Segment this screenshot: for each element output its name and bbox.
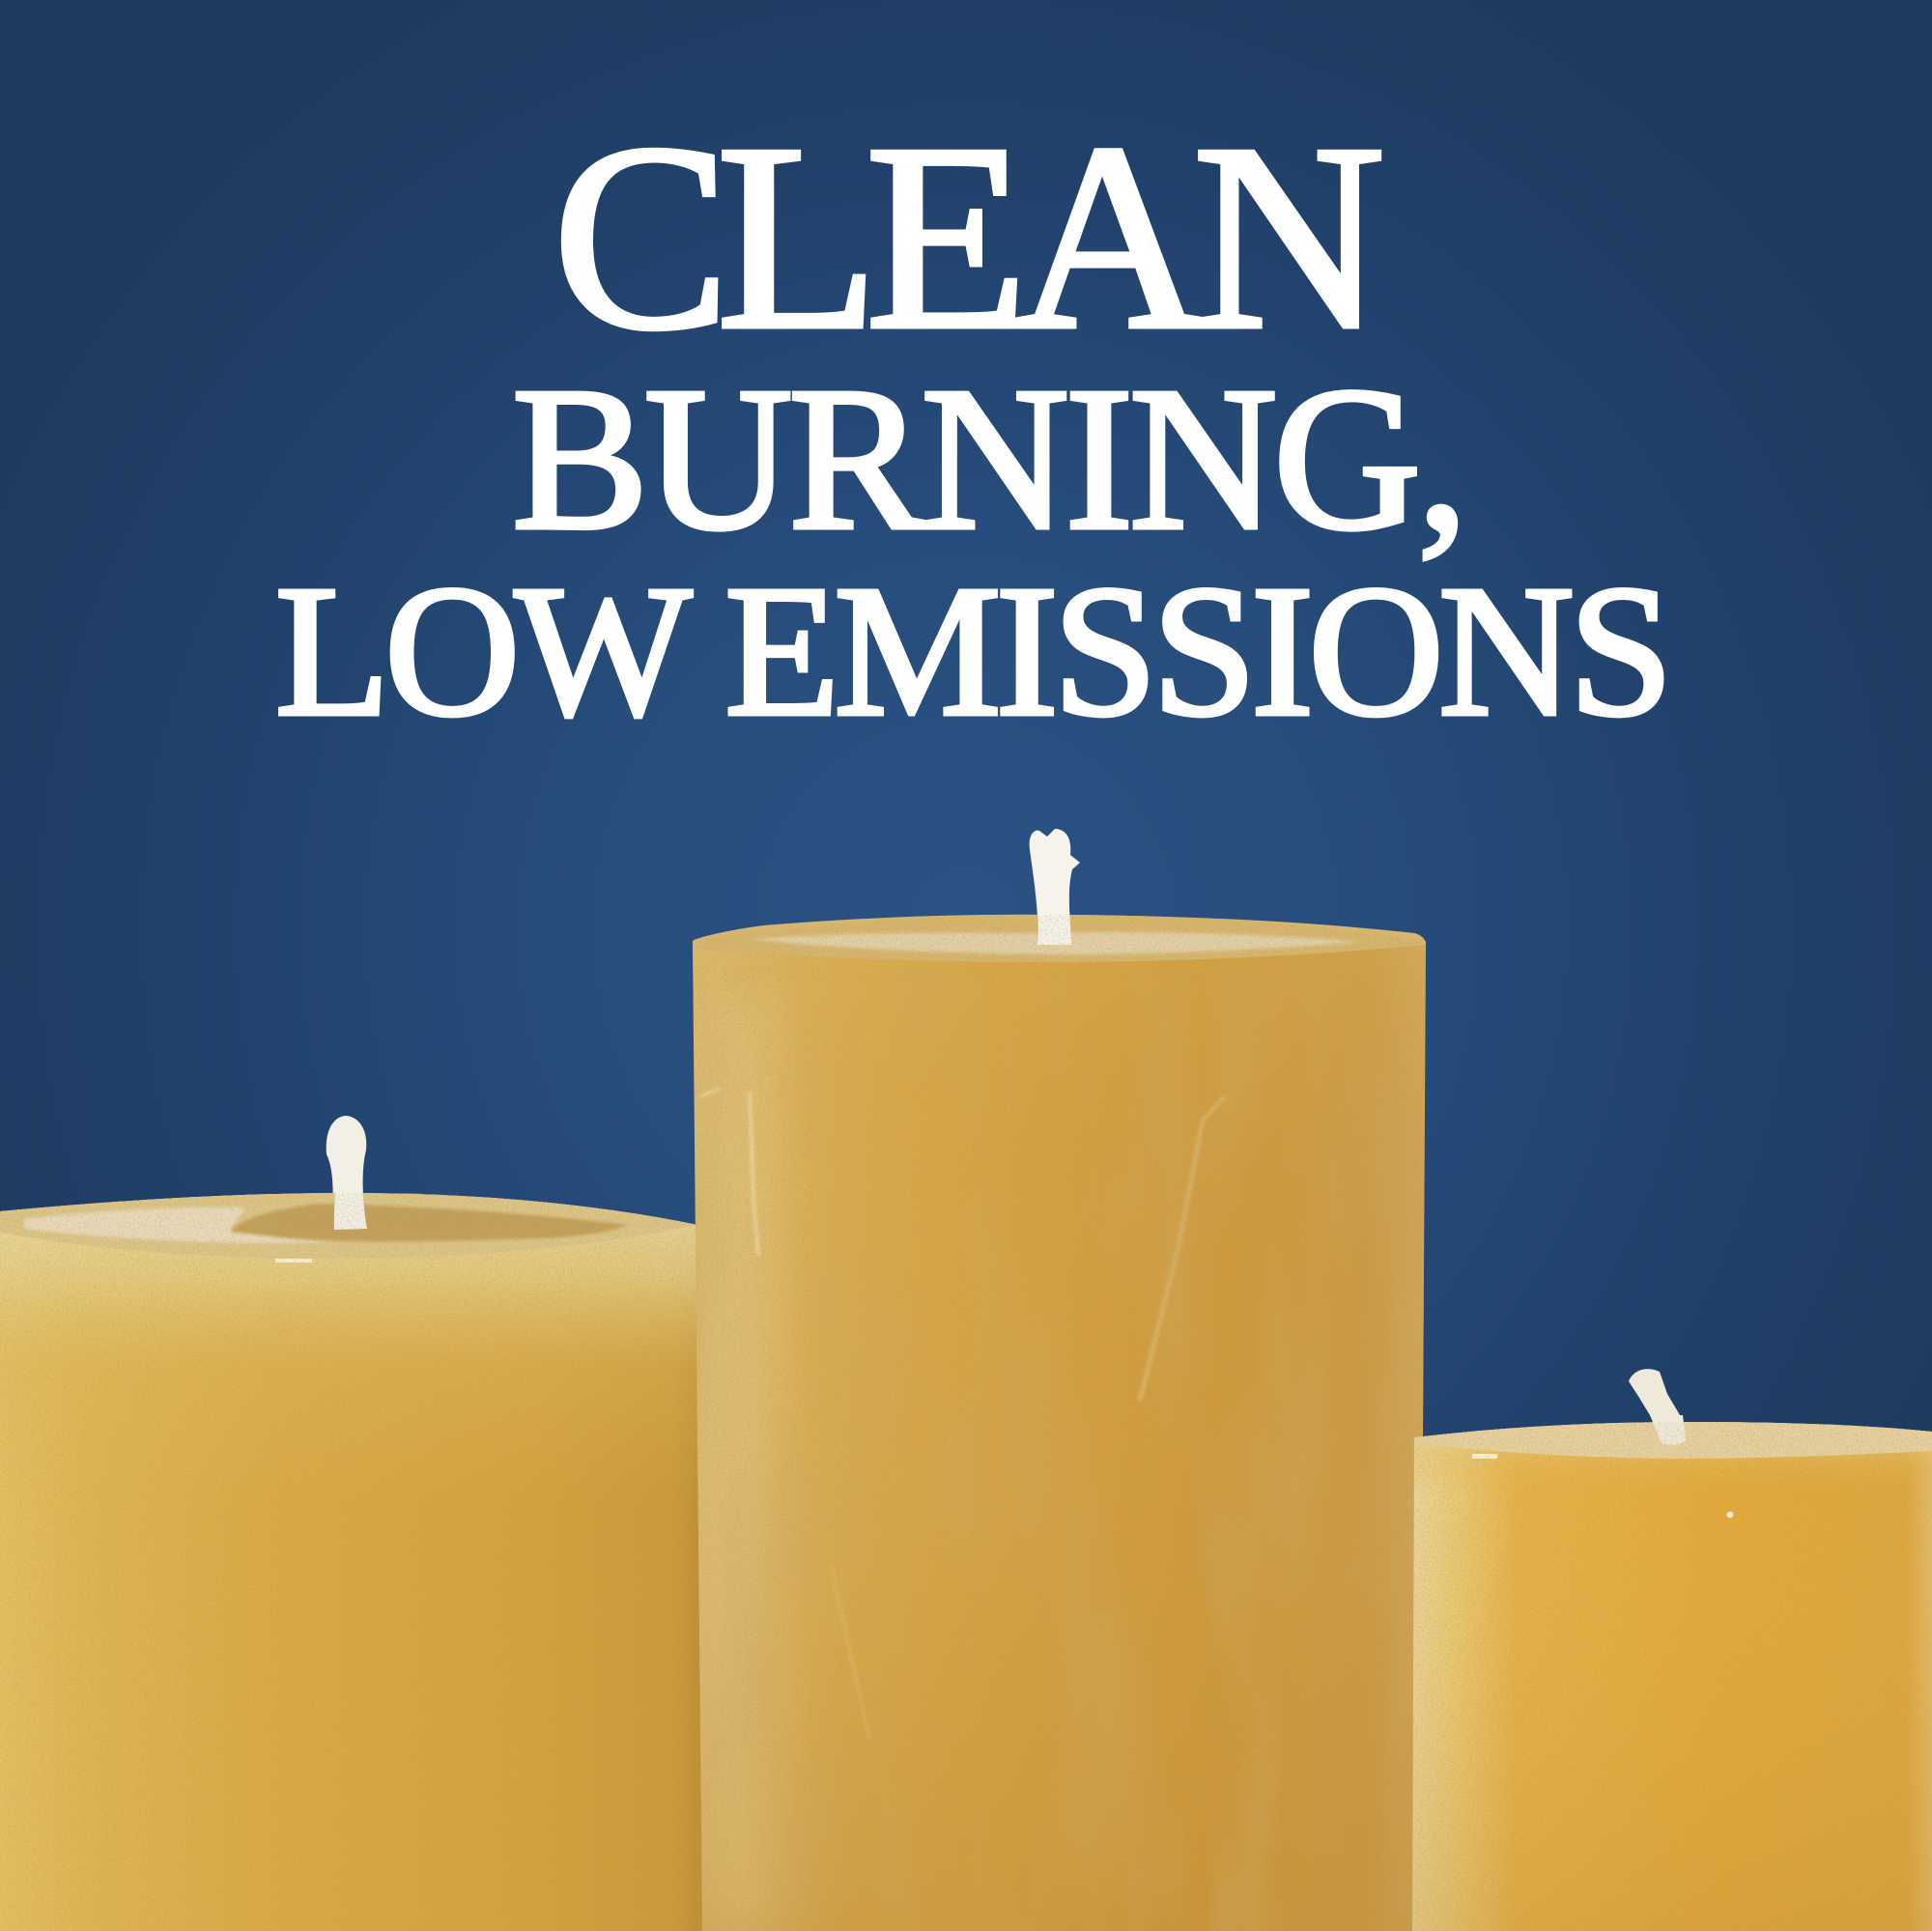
right candle [1412, 1369, 1932, 1931]
right candle top surface [1414, 1422, 1932, 1459]
left wick base [327, 1150, 367, 1230]
middle wick base [1036, 889, 1071, 945]
left highlight [275, 1259, 312, 1263]
middle wax mottling [693, 966, 1427, 1931]
title line: LOW EMISSIONS: LOW EMISSIONS [275, 547, 1673, 754]
left candle body [0, 1193, 707, 1931]
candles photo [0, 829, 1932, 1931]
title [275, 89, 1673, 754]
left candle [0, 1116, 707, 1931]
left candle top surface [0, 1193, 697, 1259]
middle candle [693, 829, 1427, 1931]
title line: BURNING,: BURNING, [512, 345, 1468, 572]
middle scratches left [700, 1089, 758, 1256]
right candle body [1412, 1422, 1932, 1931]
right spot [1727, 1511, 1733, 1519]
title line: CLEAN: CLEAN [553, 89, 1385, 384]
left candle wick [327, 1116, 367, 1230]
left top pale patch [24, 1207, 333, 1243]
middle candle wick [1030, 829, 1080, 945]
left top brown patch [230, 1204, 628, 1241]
right wick base [1650, 1415, 1686, 1445]
middle candle body [693, 915, 1426, 1931]
middle candle top surface [694, 915, 1426, 962]
right candle wick [1629, 1369, 1686, 1445]
middle scratch [1140, 1096, 1225, 1401]
middle lower scratches [831, 1565, 869, 1739]
wax grain texture [0, 908, 1932, 1931]
middle top pale patch [749, 932, 1362, 954]
right highlight [1472, 1454, 1497, 1459]
middle left pale streak [715, 985, 773, 1931]
